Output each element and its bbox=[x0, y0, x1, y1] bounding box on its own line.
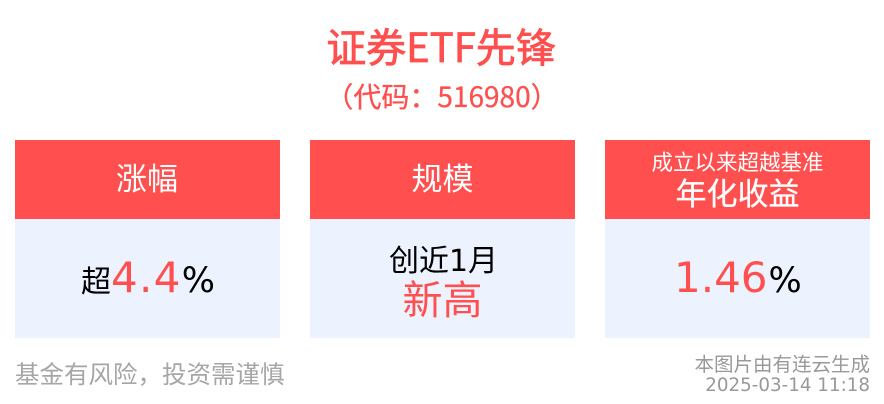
subtitle: fund code: （代码：516980） bbox=[325, 76, 559, 116]
gain value: 超4.4% bbox=[81, 253, 215, 302]
return value bbox=[605, 219, 870, 338]
gain header bbox=[15, 140, 280, 219]
return header: 年化收益 bbox=[676, 169, 800, 214]
credit and timestamp: 本图片由有连云生成 bbox=[694, 348, 870, 377]
gain header: 涨幅 bbox=[116, 154, 178, 199]
scale value bbox=[310, 219, 575, 338]
panel: scale bbox=[310, 140, 575, 338]
scale header bbox=[310, 140, 575, 219]
scale value: 新高 bbox=[402, 268, 482, 326]
panel: annualized return bbox=[605, 140, 870, 338]
title: 证券ETF先锋 bbox=[326, 16, 556, 74]
credit and timestamp: 2025-03-14 11:18 bbox=[705, 374, 870, 396]
return value: 1.46% bbox=[674, 253, 802, 302]
scale header: 规模 bbox=[412, 154, 474, 199]
gain value bbox=[15, 219, 280, 338]
panel: gain bbox=[15, 140, 280, 338]
scale value: 创近1月 bbox=[389, 236, 498, 280]
disclaimer: 基金有风险，投资需谨慎 bbox=[15, 356, 284, 391]
credit and timestamp bbox=[694, 348, 870, 396]
return header: 成立以来超越基准 bbox=[651, 146, 824, 177]
return header bbox=[605, 140, 870, 219]
